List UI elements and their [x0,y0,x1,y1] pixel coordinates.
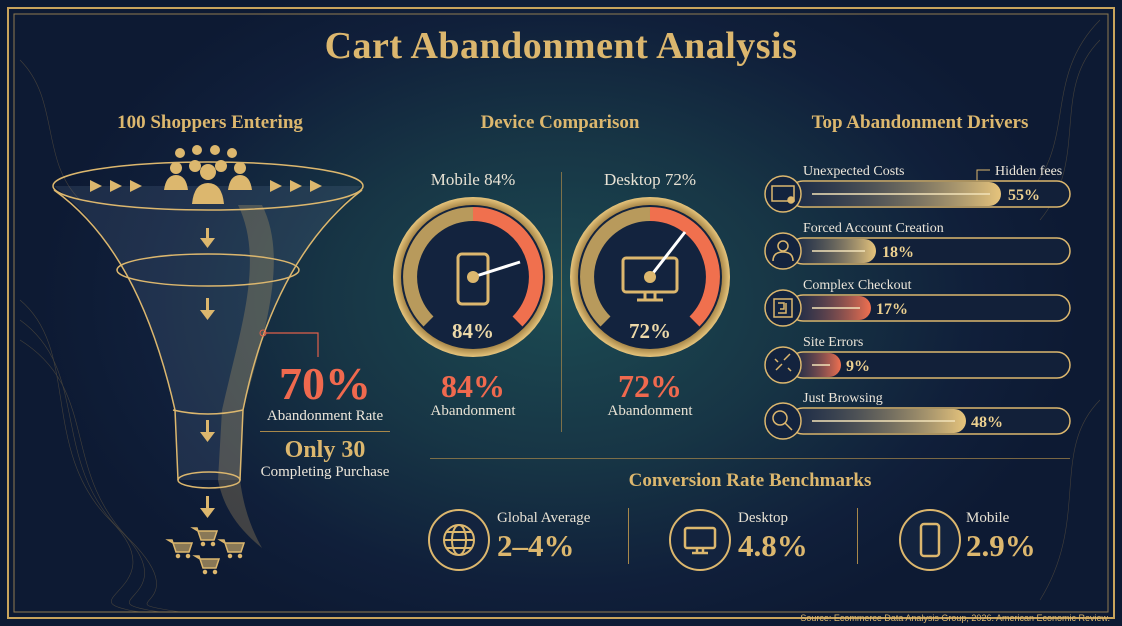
title: Cart Abandonment Analysis [325,25,797,67]
heading: device comparison: Device Comparison [481,112,639,133]
bar chart: drivers: Hidden fees [995,164,1062,179]
benchmark: desktop: 4.8% [738,528,808,563]
bar chart: drivers: 9% [846,358,870,375]
benchmark: global [428,509,590,571]
stat: 70% abandonment: Completing Purchase [261,464,389,480]
benchmark: desktop: Desktop [738,510,788,526]
funnel graphic [52,145,364,574]
gauge: desktop: 72% [618,368,682,404]
bar chart: drivers: 17% [876,301,908,318]
stat: 70% abandonment: Abandonment Rate [267,408,383,424]
gauge: mobile [393,170,553,419]
stat: 70% abandonment: 70% [279,358,371,409]
gauge: mobile: 84% [441,368,505,404]
benchmark: global: 2–4% [497,528,574,563]
source note: Source: Ecommerce Data Analysis Group, 2026. American Economic Review. [800,613,1110,623]
heading: benchmarks: Conversion Rate Benchmarks [629,470,871,491]
benchmark: mobile: 2.9% [966,528,1036,563]
bar chart: drivers: 48% [971,414,1003,431]
gauge: mobile: Mobile 84% [431,170,515,189]
bar chart: drivers: Forced Account Creation [803,221,944,236]
bar chart: drivers: 55% [1008,187,1040,204]
icon: crowd [164,145,252,204]
heading: drivers: Top Abandonment Drivers [812,112,1028,133]
bar chart: drivers: Site Errors [803,335,863,350]
bar chart: drivers: Just Browsing [803,391,883,406]
gauge: desktop: Desktop 72% [604,170,696,189]
gauge: mobile: Abandonment [430,403,515,419]
benchmark: mobile: Mobile [966,510,1009,526]
heading: funnel: 100 Shoppers Entering [117,112,303,133]
gauge: desktop: Abandonment [608,403,692,419]
gauge: desktop: 72% [629,319,671,343]
bar chart: drivers: 18% [882,244,914,261]
benchmark: desktop [669,509,808,571]
stat: 70% abandonment: Only 30 [285,437,365,463]
bar chart: drivers: Unexpected Costs [803,164,904,179]
benchmark: global: Global Average [497,510,590,526]
gauge: mobile: 84% [452,319,494,343]
gauge: desktop [570,170,730,419]
bar chart: drivers [764,164,1071,440]
benchmark: mobile [899,509,1036,571]
bar chart: drivers: Complex Checkout [803,278,912,293]
stat: 70% abandonment [260,358,390,480]
